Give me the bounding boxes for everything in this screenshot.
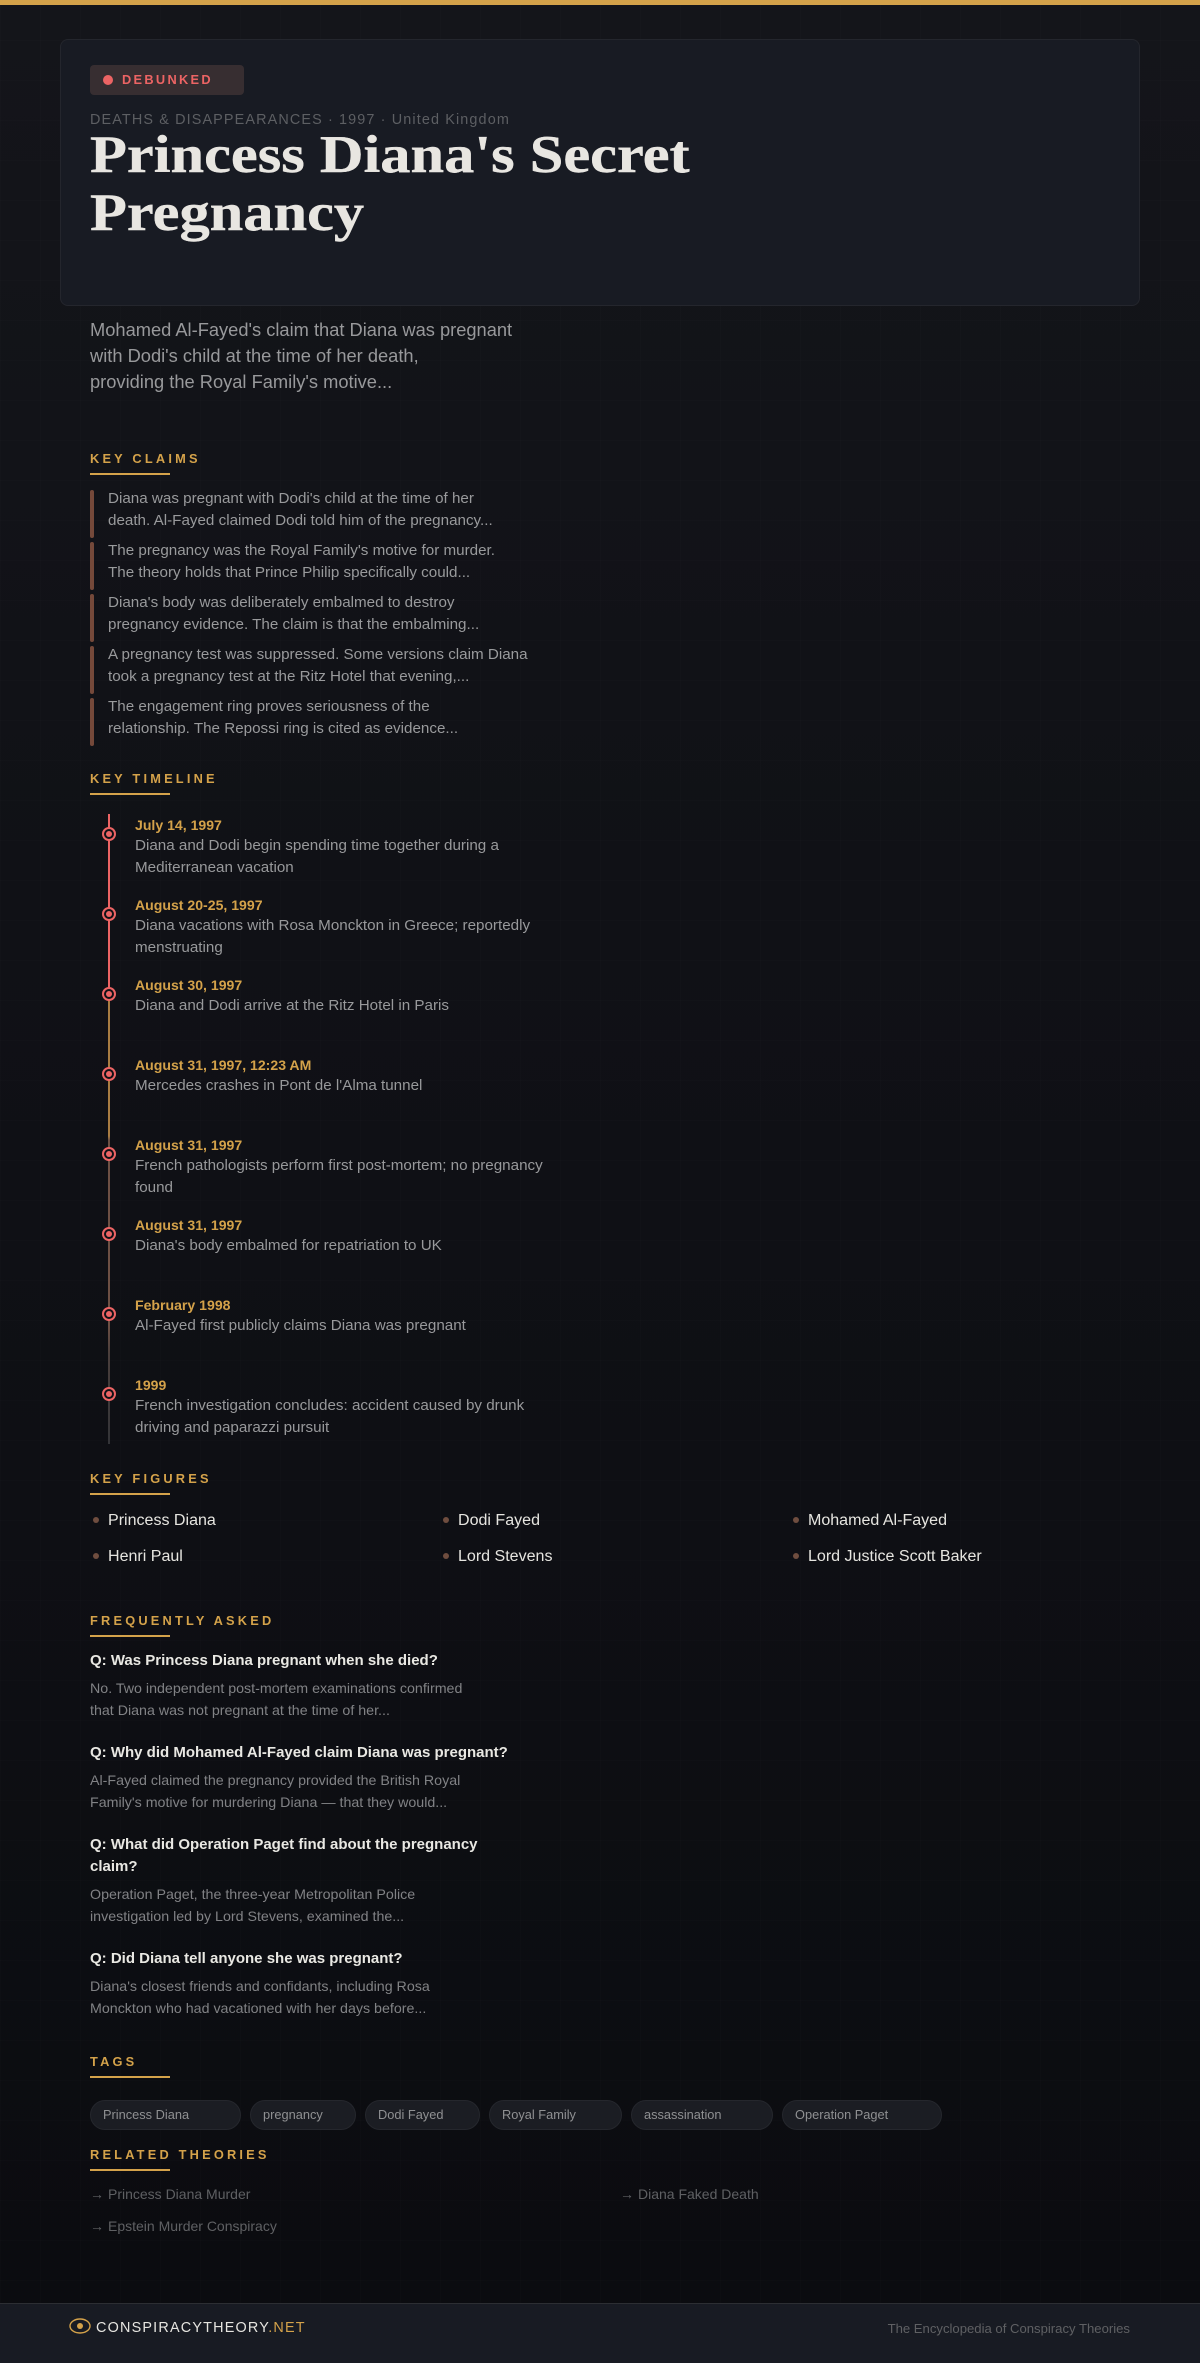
event: August 31, 1997, 12:23 AM: Mercedes crashes in Pont de l'Alma tunnel (135, 1077, 422, 1094)
tag: Royal Family (502, 2107, 576, 2122)
panel: related theories links (90, 2186, 759, 2234)
claim 2 (90, 542, 495, 590)
claim 2: The pregnancy was the Royal Family's motive for murder. (108, 542, 495, 559)
title: Princess Diana's Secret (90, 126, 690, 184)
link: Epstein Murder Conspiracy: → (90, 2218, 104, 2234)
timeline line (108, 814, 110, 1444)
tag (782, 2100, 942, 2130)
heading: tags: TAGS (90, 2054, 137, 2069)
event: August 31, 1997 embalmed (102, 1217, 442, 1254)
tag (90, 2100, 241, 2130)
event: August 31, 1997, 12:23 AM (102, 1057, 422, 1094)
event: August 31, 1997, 12:23 AM: August 31, 1997, 12:23 AM (135, 1057, 311, 1073)
claim 4: A pregnancy test was suppressed. Some versions claim Diana (108, 646, 528, 663)
event: August 30, 1997: August 30, 1997 (135, 977, 242, 993)
event: August 31, 1997 post-mortem: August 31, 1997 (135, 1137, 242, 1153)
event: 1999: 1999 (135, 1377, 166, 1393)
event: August 20-25, 1997: menstruating (135, 939, 223, 956)
tag: Operation Paget (795, 2107, 888, 2122)
faq 1 (90, 1652, 462, 1719)
figure: Lord Stevens: Lord Stevens (458, 1547, 552, 1565)
event: 1999 (102, 1377, 524, 1436)
event: February 1998: Al-Fayed first publicly claims Diana was pregnant (135, 1317, 466, 1334)
event: August 20-25, 1997 (102, 897, 530, 956)
status badge: debunked (90, 65, 244, 95)
faq 2: Family's motive for murdering Diana — that they would... (90, 1795, 447, 1811)
faq 1: that Diana was not pregnant at the time of her... (90, 1703, 390, 1719)
lead summary: with Dodi's child at the time of her death, (90, 345, 419, 366)
category meta line: DEATHS & DISAPPEARANCES · 1997 · United Kingdom (90, 112, 510, 128)
event: August 20-25, 1997: Diana vacations with Rosa Monckton in Greece; reportedly (135, 917, 530, 934)
event: July 14, 1997: Diana and Dodi begin spending time together during a (135, 837, 499, 854)
heading: key claims: KEY CLAIMS (90, 451, 201, 466)
claim 1: death. Al-Fayed claimed Dodi told him of the pregnancy... (108, 512, 493, 529)
faq 2 (90, 1744, 508, 1811)
link: Diana Faked Death: → (620, 2186, 634, 2202)
panel: FAQ list (90, 1652, 508, 2017)
claim 5 (90, 698, 458, 746)
tag: assassination (644, 2107, 722, 2122)
claim 5: The engagement ring proves seriousness of the (108, 698, 430, 715)
event: February 1998 (102, 1297, 466, 1334)
title (90, 126, 690, 242)
faq 3: Q: What did Operation Paget find about the pregnancy (90, 1836, 478, 1853)
link: Epstein Murder Conspiracy: Epstein Murder Conspiracy (108, 2218, 277, 2234)
panel: footer (0, 2303, 1200, 2363)
lead summary: Mohamed Al-Fayed's claim that Diana was pregnant (90, 319, 512, 340)
title: Pregnancy (90, 184, 364, 242)
event: August 31, 1997 post-mortem: French pathologists perform first post-mortem; no pregnancy (135, 1157, 543, 1174)
claim 1 (90, 490, 493, 538)
faq 2: Al-Fayed claimed the pregnancy provided the British Royal (90, 1773, 460, 1789)
tag: Princess Diana (103, 2107, 189, 2122)
event: 1999: French investigation concludes: accident caused by drunk (135, 1397, 524, 1414)
heading: frequently asked: FREQUENTLY ASKED (90, 1613, 274, 1628)
claim 2: The theory holds that Prince Philip specifically could... (108, 564, 470, 581)
claim 4 (90, 646, 528, 694)
tag (489, 2100, 622, 2130)
footer tagline: The Encyclopedia of Conspiracy Theories (888, 2321, 1130, 2336)
heading: key figures: KEY FIGURES (90, 1471, 212, 1486)
panel: key claims list (90, 490, 528, 746)
tag: Dodi Fayed (378, 2107, 443, 2122)
figure: Dodi Fayed: Dodi Fayed (458, 1511, 540, 1529)
event: August 31, 1997 embalmed: August 31, 1997 (135, 1217, 242, 1233)
panel: key figures grid (93, 1511, 982, 1565)
event: August 30, 1997 (102, 977, 449, 1014)
event: July 14, 1997: July 14, 1997 (135, 817, 222, 833)
tag (365, 2100, 480, 2130)
figure: Mohamed Al-Fayed: Mohamed Al-Fayed (808, 1511, 947, 1529)
footer logo wordmark: CONSPIRACYTHEORY.NET (96, 2320, 306, 2336)
link: Princess Diana Murder: → (90, 2186, 104, 2202)
faq 3: Operation Paget, the three-year Metropolitan Police (90, 1887, 415, 1903)
claim 3: pregnancy evidence. The claim is that the embalming... (108, 616, 479, 633)
claim 3 (90, 594, 479, 642)
heading: related theories: RELATED THEORIES (90, 2147, 270, 2162)
faq 3 (90, 1836, 478, 1925)
faq 4 (90, 1950, 430, 2017)
event: August 31, 1997 post-mortem (102, 1137, 543, 1196)
faq 4: Diana's closest friends and confidants, including Rosa (90, 1979, 430, 1995)
faq 1: No. Two independent post-mortem examinations confirmed (90, 1681, 462, 1697)
faq 3: claim? (90, 1858, 138, 1875)
figure: Princess Diana: Princess Diana (108, 1511, 216, 1529)
event: August 31, 1997 embalmed: Diana's body embalmed for repatriation to UK (135, 1237, 442, 1254)
claim 3: Diana's body was deliberately embalmed to destroy (108, 594, 454, 611)
figure: Henri Paul: Henri Paul (108, 1547, 183, 1565)
claim 1: Diana was pregnant with Dodi's child at the time of her (108, 490, 474, 507)
event: August 30, 1997: Diana and Dodi arrive at the Ritz Hotel in Paris (135, 997, 449, 1014)
lead summary: providing the Royal Family's motive... (90, 371, 392, 392)
event: February 1998: February 1998 (135, 1297, 230, 1313)
faq 4: Monckton who had vacationed with her days before... (90, 2001, 426, 2017)
faq 4: Q: Did Diana tell anyone she was pregnant? (90, 1950, 403, 1967)
panel: hero header (60, 39, 1140, 306)
top accent bar (0, 0, 1200, 5)
event: August 20-25, 1997: August 20-25, 1997 (135, 897, 263, 913)
icon: status dot (103, 75, 113, 85)
faq 2: Q: Why did Mohamed Al-Fayed claim Diana was pregnant? (90, 1744, 508, 1761)
tag (250, 2100, 356, 2130)
event: 1999: driving and paparazzi pursuit (135, 1419, 329, 1436)
event: July 14, 1997: Mediterranean vacation (135, 859, 294, 876)
link: Diana Faked Death: Diana Faked Death (638, 2186, 759, 2202)
badge label: DEBUNKED (122, 72, 213, 87)
panel: tags row (90, 2100, 942, 2130)
tag (631, 2100, 773, 2130)
faq 1: Q: Was Princess Diana pregnant when she died? (90, 1652, 438, 1669)
panel: timeline events (102, 817, 543, 1436)
figure: Lord Justice Scott Baker: Lord Justice Scott Baker (808, 1547, 982, 1565)
link: Princess Diana Murder: Princess Diana Murder (108, 2186, 250, 2202)
event: August 31, 1997 post-mortem: found (135, 1179, 173, 1196)
tag: pregnancy (263, 2107, 323, 2122)
icon: eye logo (69, 2318, 91, 2334)
claim 4: took a pregnancy test at the Ritz Hotel that evening,... (108, 668, 469, 685)
lead summary (90, 319, 512, 392)
event: July 14, 1997 (102, 817, 499, 876)
claim 5: relationship. The Repossi ring is cited as evidence... (108, 720, 458, 737)
heading: key timeline: KEY TIMELINE (90, 771, 218, 786)
faq 3: investigation led by Lord Stevens, examined the... (90, 1909, 404, 1925)
